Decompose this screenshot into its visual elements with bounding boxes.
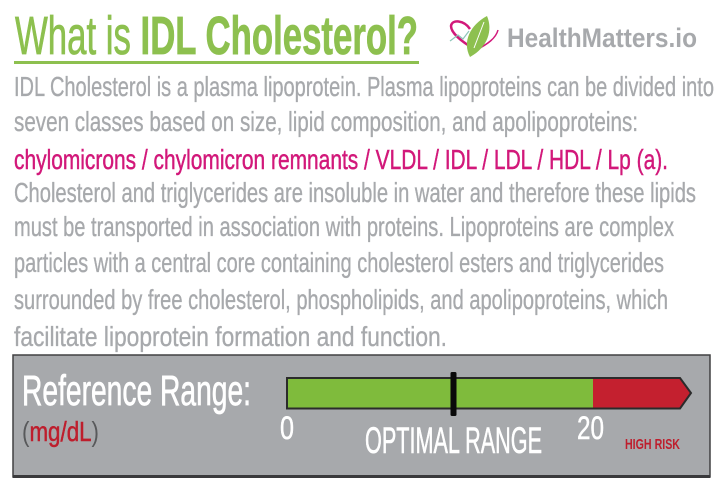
icon: heart and leaf bbox=[450, 16, 498, 57]
unit label: (mg/dL) bbox=[22, 416, 99, 447]
description text block bbox=[14, 71, 714, 352]
title: What is IDL Cholesterol? bbox=[15, 6, 418, 66]
label: 20: 20 bbox=[577, 410, 604, 446]
range bar bbox=[287, 372, 691, 416]
logo: HealthMatters.io bbox=[450, 16, 697, 57]
result marker bbox=[450, 372, 456, 416]
panel: reference range bbox=[13, 355, 710, 478]
description text block: facilitate lipoprotein formation and function. bbox=[14, 321, 447, 352]
label: high risk: HIGH RISK bbox=[625, 436, 680, 453]
label: optimal range: OPTIMAL RANGE bbox=[365, 420, 542, 461]
label: 0: 0 bbox=[280, 410, 294, 446]
heading: Reference Range: Reference Range: bbox=[22, 367, 251, 415]
logo wordmark: HealthMatters.io bbox=[507, 23, 697, 53]
